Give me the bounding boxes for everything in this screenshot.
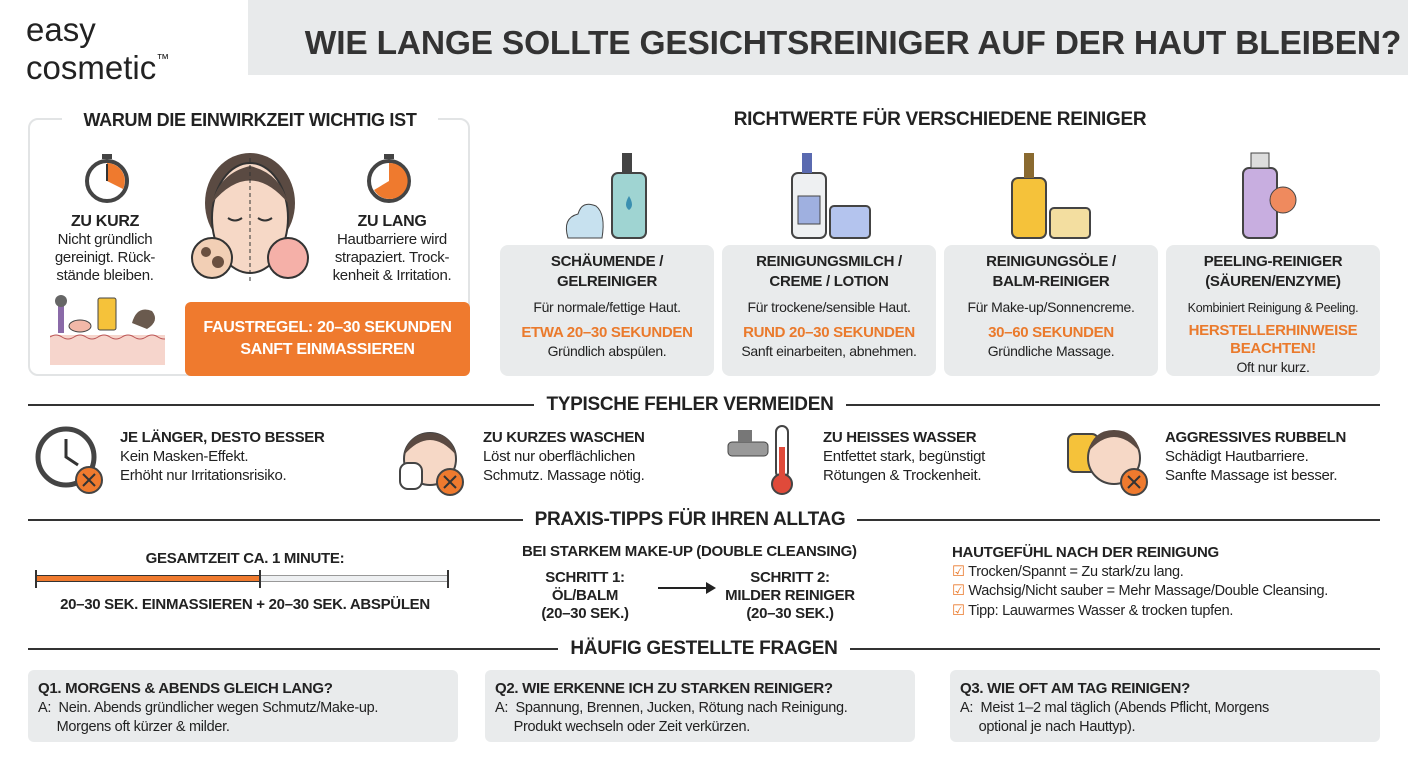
card: peeling: BEACHTEN! (1230, 340, 1316, 357)
card: peeling: (SÄUREN/ENZYME) (1205, 273, 1341, 290)
heading: why: WARUM DIE EINWIRKZEIT WICHTIG IST (83, 110, 417, 130)
checklist: hautgefuehl: ☑ Trocken/Spannt = Zu stark/zu lang. (952, 564, 1184, 580)
card: milch: Für trockene/sensible Haut. Sanft einarbeiten, abnehmen. (741, 299, 917, 359)
faq 3: A: Meist 1–2 mal täglich (Abends Pflicht, Morgens (960, 700, 1269, 716)
timeline: gesamtzeit: GESAMTZEIT CA. 1 MINUTE: (146, 550, 344, 567)
faq 2: Q2. WIE ERKENNE ICH ZU STARKEN REINIGER? (495, 680, 833, 697)
text: zu kurz: Nicht gründlich gereinigt. Rück-stände bleiben. (55, 231, 155, 284)
error: kurz: ZU KURZES WASCHEN (483, 429, 645, 446)
icon: tap & thermometer (728, 425, 793, 495)
icon: sponge face (1067, 430, 1148, 496)
card: schaeumend: SCHÄUMENDE / (551, 253, 663, 270)
error: rubbeln: Sanfte Massage ist besser. (1165, 467, 1337, 484)
faq 2: A: Spannung, Brennen, Jucken, Rötung nach Reinigung. (495, 700, 848, 716)
error: heiss: ZU HEISSES WASSER (823, 429, 976, 446)
faq 1 (28, 670, 458, 742)
heading: richtwerte: RICHTWERTE FÜR VERSCHIEDENE REINIGER (734, 109, 1146, 130)
card: oele (944, 245, 1158, 376)
card: schaeumend (500, 245, 714, 376)
callout: faustregel: SANFT EINMASSIEREN (240, 341, 415, 358)
faq 2: Produkt wechseln oder Zeit verkürzen. (514, 719, 750, 735)
callout: faustregel (185, 302, 470, 376)
error: kurz: Schmutz. Massage nötig. (483, 467, 645, 484)
card: oele: 30–60 SEKUNDEN (988, 324, 1114, 341)
title banner: WIE LANGE SOLLTE GESICHTSREINIGER AUF DER HAUT BLEIBEN? (305, 25, 1401, 62)
checklist: hautgefuehl (952, 544, 1328, 618)
panel: why (28, 118, 470, 376)
faq 3: optional je nach Hauttyp). (979, 719, 1135, 735)
icon: stopwatch short (85, 154, 129, 203)
error: laenger: JE LÄNGER, DESTO BESSER (120, 429, 325, 446)
logo: cosmetic™ (26, 49, 169, 86)
text: zu lang: ZU LANG (357, 213, 426, 230)
callout: faustregel: FAUSTREGEL: 20–30 SEKUNDEN (203, 319, 452, 336)
error: kurz (483, 429, 645, 484)
card: milch (722, 245, 936, 376)
card: peeling: PEELING-REINIGER (1204, 253, 1342, 270)
error: heiss (823, 429, 986, 484)
icon: oil bottle (1011, 153, 1091, 239)
card: milch: RUND 20–30 SEKUNDEN (743, 324, 915, 341)
faq 3: Q3. WIE OFT AM TAG REINIGEN? (960, 680, 1190, 697)
error: laenger: Erhöht nur Irritationsrisiko. (120, 467, 286, 484)
card: peeling: Kombiniert Reinigung & Peeling. Oft nur kurz. (1188, 301, 1358, 375)
card: schaeumend: Für normale/fettige Haut. Gründlich abspülen. (533, 299, 681, 359)
text: zu kurz: ZU KURZ (71, 213, 139, 230)
icon: clock (36, 426, 103, 494)
icon: washing face (399, 432, 464, 496)
faq 1: A: Nein. Abends gründlicher wegen Schmutz/Make-up. (38, 700, 378, 716)
error: rubbeln: AGGRESSIVES RUBBELN (1165, 429, 1346, 446)
heading: faq: HÄUFIG GESTELLTE FRAGEN (570, 638, 838, 659)
logo (26, 11, 169, 86)
error: laenger (120, 429, 325, 484)
card: milch: CREME / LOTION (769, 273, 889, 290)
error: heiss: Rötungen & Trockenheit. (823, 467, 981, 484)
icon: face (191, 153, 309, 281)
faq 1: Q1. MORGENS & ABENDS GLEICH LANG? (38, 680, 333, 697)
double cleansing: SCHRITT 2: (750, 569, 830, 586)
double cleansing: ÖL/BALM (552, 587, 618, 604)
error: heiss: Entfettet stark, begünstigt (823, 448, 985, 465)
checklist: hautgefuehl: ☑ Tipp: Lauwarmes Wasser & trocken tupfen. (952, 602, 1233, 618)
timeline: gesamtzeit: 20–30 SEK. EINMASSIEREN + 20–30 SEK. ABSPÜLEN (60, 596, 430, 613)
card: oele: BALM-REINIGER (993, 273, 1109, 290)
error: laenger: Kein Masken-Effekt. (120, 448, 248, 465)
card: peeling (1166, 245, 1380, 376)
text: zu lang: Hautbarriere wird strapaziert. Trock-kenheit & Irritation. (333, 231, 451, 284)
checklist: hautgefuehl: ☑ Wachsig/Nicht sauber = Mehr Massage/Double Cleansing. (952, 583, 1328, 599)
double cleansing: (20–30 SEK.) (746, 605, 834, 622)
double cleansing: (20–30 SEK.) (541, 605, 629, 622)
card: schaeumend: GELREINIGER (557, 273, 657, 290)
card: milch: REINIGUNGSMILCH / (756, 253, 902, 270)
faq 1: Morgens oft kürzer & milder. (57, 719, 230, 735)
error: rubbeln: Schädigt Hautbarriere. (1165, 448, 1308, 465)
icon: makeup on skin (50, 295, 165, 365)
double cleansing: SCHRITT 1: (545, 569, 625, 586)
checklist: hautgefuehl: HAUTGEFÜHL NACH DER REINIGUNG (952, 544, 1219, 561)
title banner (248, 0, 1408, 75)
double cleansing: BEI STARKEM MAKE-UP (DOUBLE CLEANSING) (522, 543, 857, 560)
faq 2 (485, 670, 915, 742)
icon: stopwatch long (367, 154, 411, 203)
card: oele: Für Make-up/Sonnencreme. Gründliche Massage. (967, 299, 1135, 359)
error: rubbeln (1165, 429, 1346, 484)
icon: milk bottle (791, 153, 871, 239)
icon: foam bottle (566, 153, 647, 239)
double cleansing (522, 543, 857, 622)
error: kurz: Löst nur oberflächlichen (483, 448, 635, 465)
heading: fehler: TYPISCHE FEHLER VERMEIDEN (546, 394, 834, 415)
card: peeling: HERSTELLERHINWEISE (1189, 322, 1357, 339)
icon: peeling bottle (1242, 152, 1296, 239)
faq 3 (950, 670, 1380, 742)
card: oele: REINIGUNGSÖLE / (986, 253, 1116, 270)
heading: praxis: PRAXIS-TIPPS FÜR IHREN ALLTAG (535, 509, 845, 530)
double cleansing: MILDER REINIGER (725, 587, 855, 604)
card: schaeumend: ETWA 20–30 SEKUNDEN (521, 324, 693, 341)
timeline: gesamtzeit (35, 550, 449, 613)
logo: easy (26, 11, 96, 48)
